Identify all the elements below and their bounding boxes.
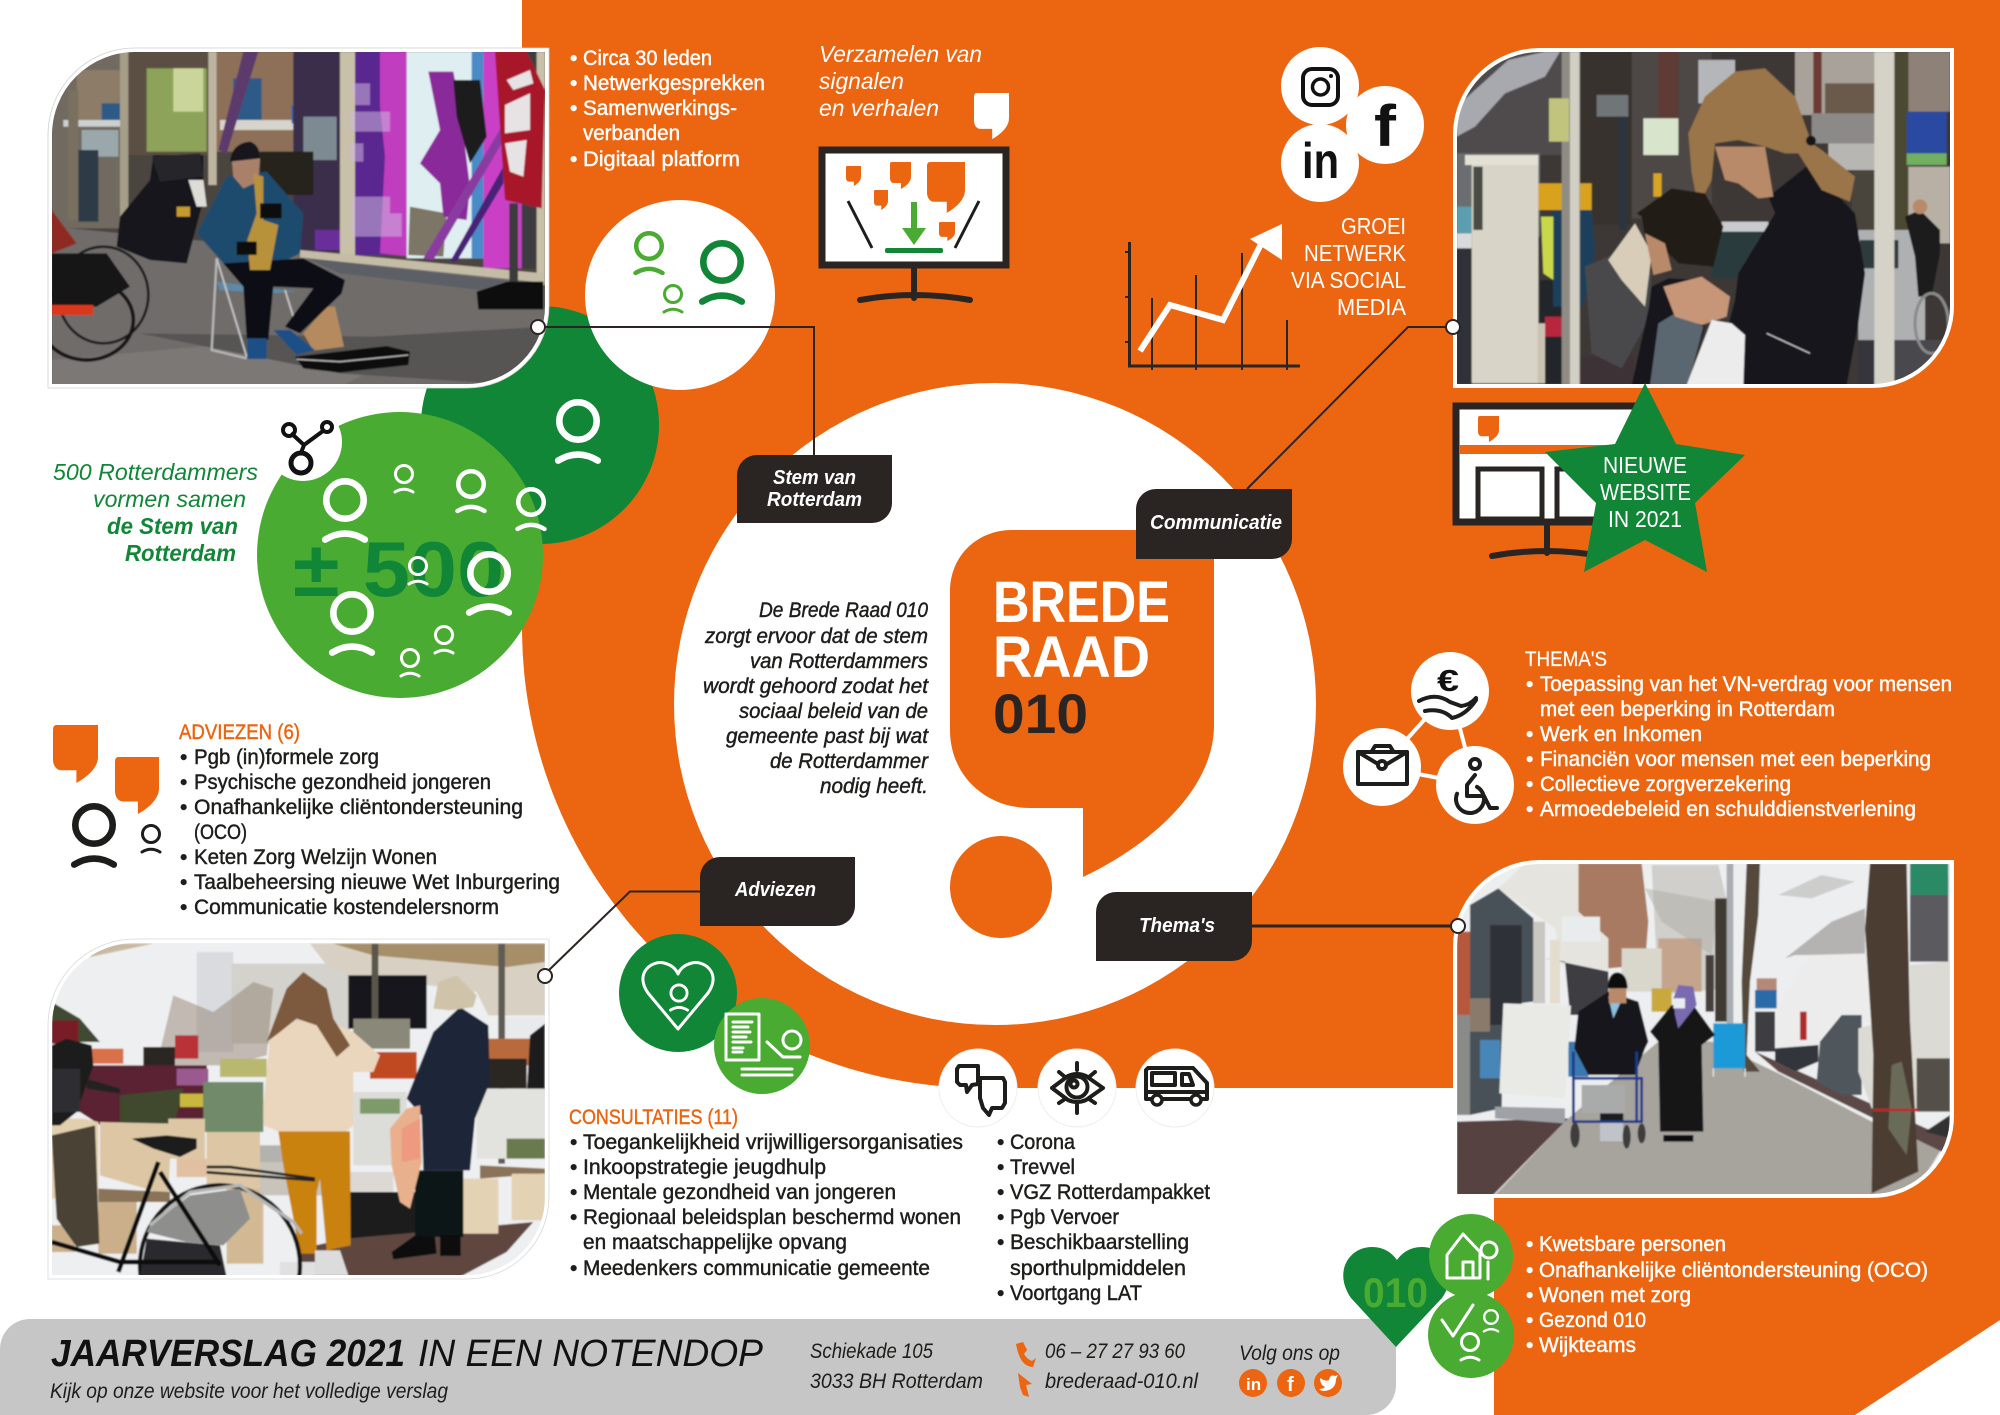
list: adviezen: Psychische gezondheid jongeren (194, 771, 491, 794)
top list: Digitaal platform (583, 148, 740, 171)
list: bottom right: • (1526, 1334, 1533, 1357)
list: bottom right: • (1526, 1309, 1533, 1332)
list: bottom right: • (1526, 1233, 1533, 1256)
top list: Circa 30 leden (583, 47, 712, 70)
top list: • (570, 72, 577, 95)
list: thema's: THEMA'S (1525, 648, 1607, 671)
list: adviezen: • (180, 771, 187, 794)
star: nieuwe website: WEBSITE (1600, 479, 1691, 505)
list: second column: • (997, 1206, 1004, 1229)
icon: network (264, 403, 342, 481)
central white circle (674, 383, 1316, 1025)
list: bottom right: Wijkteams (1539, 1334, 1636, 1357)
address: Schiekade 105 (810, 1340, 933, 1363)
star: nieuwe website (1545, 383, 1745, 572)
list: second column: • (997, 1181, 1004, 1204)
label: Communicatie (1136, 489, 1292, 559)
address: 3033 BH Rotterdam (810, 1370, 983, 1393)
label: Stem van Rotterdam (737, 455, 892, 523)
list: adviezen (179, 721, 560, 919)
list: second column: • (997, 1131, 1004, 1154)
top list (570, 47, 765, 171)
label: Stem van Rotterdam: Stem van (773, 467, 856, 489)
list: second column: Voortgang LAT (1010, 1282, 1142, 1305)
icon: website monitor (1456, 406, 1646, 556)
list: second column: • (997, 1282, 1004, 1305)
list: adviezen: • (180, 846, 187, 869)
photo: elderly couple on street (1452, 860, 1955, 1203)
text: 500 Rotterdammers: Rotterdam (125, 540, 236, 566)
label: Communicatie: Communicatie (1150, 512, 1282, 534)
footer title: Kijk op onze website voor het volledige verslag (50, 1380, 448, 1403)
list: thema's: Financiën voor mensen met een beperking (1540, 748, 1931, 771)
list: second column: • (997, 1156, 1004, 1179)
text: 500 Rotterdammers: vormen samen (93, 486, 246, 512)
top list: • (570, 97, 577, 120)
list: adviezen: • (180, 871, 187, 894)
intro text: van Rotterdammers (750, 650, 928, 673)
icons: social media (1281, 47, 1424, 202)
icons: themes network: € (1437, 663, 1459, 698)
top list: • (570, 148, 577, 171)
list: consultaties: en maatschappelijke opvang (583, 1231, 847, 1254)
list: thema's: • (1526, 798, 1533, 821)
footer title (50, 1333, 764, 1403)
star: nieuwe website: NIEUWE (1603, 452, 1687, 478)
list: thema's: • (1526, 723, 1533, 746)
intro text: de Rotterdammer (770, 750, 929, 773)
list: bottom right: Onafhankelijke cliëntondersteuning (OCO) (1539, 1259, 1928, 1282)
list: second column: Trevvel (1010, 1156, 1075, 1179)
logo: Brede Raad 010: 010 (993, 682, 1088, 745)
list: thema's (1525, 648, 1952, 821)
list: adviezen: • (180, 896, 187, 919)
list: second column: Corona (1010, 1131, 1075, 1154)
icon: green heart 010: 010 (1363, 1269, 1428, 1316)
connector: Adviezen (538, 892, 700, 983)
list: bottom right: • (1526, 1284, 1533, 1307)
text: Verzamelen van signalen: Verzamelen van (819, 41, 982, 67)
list: second column: sporthulpmiddelen (1010, 1257, 1186, 1280)
connector: Communicatie (1247, 320, 1460, 489)
list: second column (997, 1131, 1210, 1305)
list: adviezen: • (180, 746, 187, 769)
photo: woman and boy looking at phone (1452, 47, 1955, 390)
photo: saxophone player on the street (40, 47, 550, 390)
list: adviezen: • (180, 796, 187, 819)
icon: green heart 010 (1343, 1247, 1450, 1347)
light green circle: 500 people (257, 412, 544, 698)
intro text: wordt gehoord zodat het (703, 675, 929, 698)
text: groei netwerk (1291, 213, 1407, 320)
text: Verzamelen van signalen: signalen (819, 68, 904, 94)
icon: house circle (1429, 1214, 1513, 1298)
intro text: sociaal beleid van de (739, 700, 928, 723)
contact (1016, 1340, 1199, 1397)
list: consultaties: CONSULTATIES (11) (569, 1106, 738, 1129)
label: Stem van Rotterdam: Rotterdam (767, 489, 862, 511)
icon: monitor with signals (822, 150, 1006, 300)
list: adviezen: (OCO) (194, 821, 247, 844)
list: thema's: • (1526, 673, 1533, 696)
list: thema's: Werk en Inkomen (1540, 723, 1702, 746)
icon: white speech bubble (974, 93, 1009, 139)
text: Verzamelen van signalen (819, 41, 982, 121)
footer title: IN EEN NOTENDOP (418, 1333, 764, 1375)
contact: 06 – 27 27 93 60 (1045, 1340, 1185, 1363)
intro text: De Brede Raad 010 (759, 599, 928, 622)
list: second column: Pgb Vervoer (1010, 1206, 1119, 1229)
icons: social media: f (1374, 94, 1397, 159)
top list: • (570, 47, 577, 70)
list: consultaties: Toegankelijkheid vrijwilligersorganisaties (583, 1131, 963, 1154)
follow us: in (1246, 1375, 1261, 1394)
intro text: gemeente past bij wat (726, 725, 929, 748)
list: adviezen: Keten Zorg Welzijn Wonen (194, 846, 437, 869)
label: Thema's (1096, 892, 1252, 961)
list: thema's: Toepassing van het VN-verdrag voor mensen (1540, 673, 1952, 696)
list: consultaties: • (570, 1257, 577, 1280)
address (810, 1340, 983, 1393)
list: adviezen: Pgb (in)formele zorg (194, 746, 379, 769)
list: thema's: Collectieve zorgverzekering (1540, 773, 1791, 796)
text: groei netwerk: VIA SOCIAL (1291, 267, 1406, 293)
follow us: f (1287, 1374, 1294, 1396)
follow us: Volg ons op (1239, 1342, 1340, 1365)
list: consultaties: Regionaal beleidsplan beschermd wonen (583, 1206, 961, 1229)
text: Verzamelen van signalen: en verhalen (819, 95, 939, 121)
list: thema's: Armoedebeleid en schulddienstverlening (1540, 798, 1916, 821)
text: 500 Rotterdammers: de Stem van (107, 513, 238, 539)
list: consultaties (569, 1106, 963, 1280)
star: nieuwe website: IN 2021 (1608, 506, 1682, 532)
icons: social media: in (1302, 133, 1339, 189)
list: consultaties: Inkoopstrategie jeugdhulp (583, 1156, 826, 1179)
icon: orange speech bubbles and persons (53, 725, 160, 865)
list: consultaties: • (570, 1156, 577, 1179)
chart: rising line (1125, 224, 1300, 370)
text: groei netwerk: NETWERK (1304, 240, 1407, 266)
list: bottom right: Gezond 010 (1539, 1309, 1646, 1332)
list: consultaties: • (570, 1131, 577, 1154)
contact: brederaad-010.nl (1045, 1370, 1199, 1393)
white circle with green persons (585, 200, 775, 390)
icon: checkmark circle (1428, 1292, 1514, 1378)
intro text: zorgt ervoor dat de stem (704, 625, 928, 648)
list: consultaties: Mentale gezondheid van jongeren (583, 1181, 896, 1204)
list: bottom right: • (1526, 1259, 1533, 1282)
photo: flower market (48, 938, 550, 1280)
list: thema's: • (1526, 748, 1533, 771)
list: consultaties: • (570, 1206, 577, 1229)
intro text: nodig heeft. (820, 775, 928, 798)
list: adviezen: Onafhankelijke cliëntondersteuning (194, 796, 523, 819)
icons: speech, eye, van (939, 1049, 1214, 1127)
label: Adviezen (700, 857, 855, 926)
list: thema's: • (1526, 773, 1533, 796)
icon: document with person (714, 998, 810, 1094)
list: consultaties: • (570, 1181, 577, 1204)
icon: heart with person (619, 934, 737, 1052)
list: adviezen: Communicatie kostendelersnorm (194, 896, 499, 919)
list: consultaties: Meedenkers communicatie gemeente (583, 1257, 930, 1280)
connector: Stem van Rotterdam (531, 320, 814, 455)
follow us (1239, 1342, 1342, 1397)
logo: Brede Raad 010: RAAD (993, 625, 1150, 690)
list: second column: Beschikbaarstelling (1010, 1231, 1189, 1254)
text: 500 Rotterdammers (53, 459, 259, 566)
light green circle: 500 people: ± 500 (293, 525, 504, 613)
text: groei netwerk: MEDIA (1337, 294, 1407, 320)
list: adviezen: ADVIEZEN (6) (179, 721, 300, 744)
connector: Thema's (1252, 919, 1465, 933)
logo: Brede Raad 010 (950, 530, 1214, 938)
list: bottom right (1526, 1233, 1928, 1357)
footer bar (0, 1319, 1396, 1415)
text: groei netwerk: GROEI (1341, 213, 1406, 239)
list: bottom right: Wonen met zorg (1539, 1284, 1691, 1307)
top list: Netwerkgesprekken (583, 72, 765, 95)
list: bottom right: Kwetsbare personen (1539, 1233, 1726, 1256)
footer title: JAARVERSLAG 2021 (51, 1333, 405, 1375)
logo: Brede Raad 010: BREDE (993, 570, 1170, 635)
label: Adviezen: Adviezen (734, 879, 816, 901)
icons: themes network (1343, 652, 1514, 824)
top list: verbanden (583, 122, 680, 145)
list: thema's: met een beperking in Rotterdam (1540, 698, 1835, 721)
intro text (703, 599, 929, 798)
dark green circle with person (421, 306, 659, 544)
top list: Samenwerkings- (583, 97, 737, 120)
list: second column: • (997, 1231, 1004, 1254)
text: 500 Rotterdammers: 500 Rotterdammers (53, 459, 259, 485)
list: adviezen: Taalbeheersing nieuwe Wet Inburgering (194, 871, 560, 894)
label: Thema's: Thema's (1139, 915, 1215, 937)
list: second column: VGZ Rotterdampakket (1010, 1181, 1210, 1204)
orange background (522, 0, 2000, 1415)
